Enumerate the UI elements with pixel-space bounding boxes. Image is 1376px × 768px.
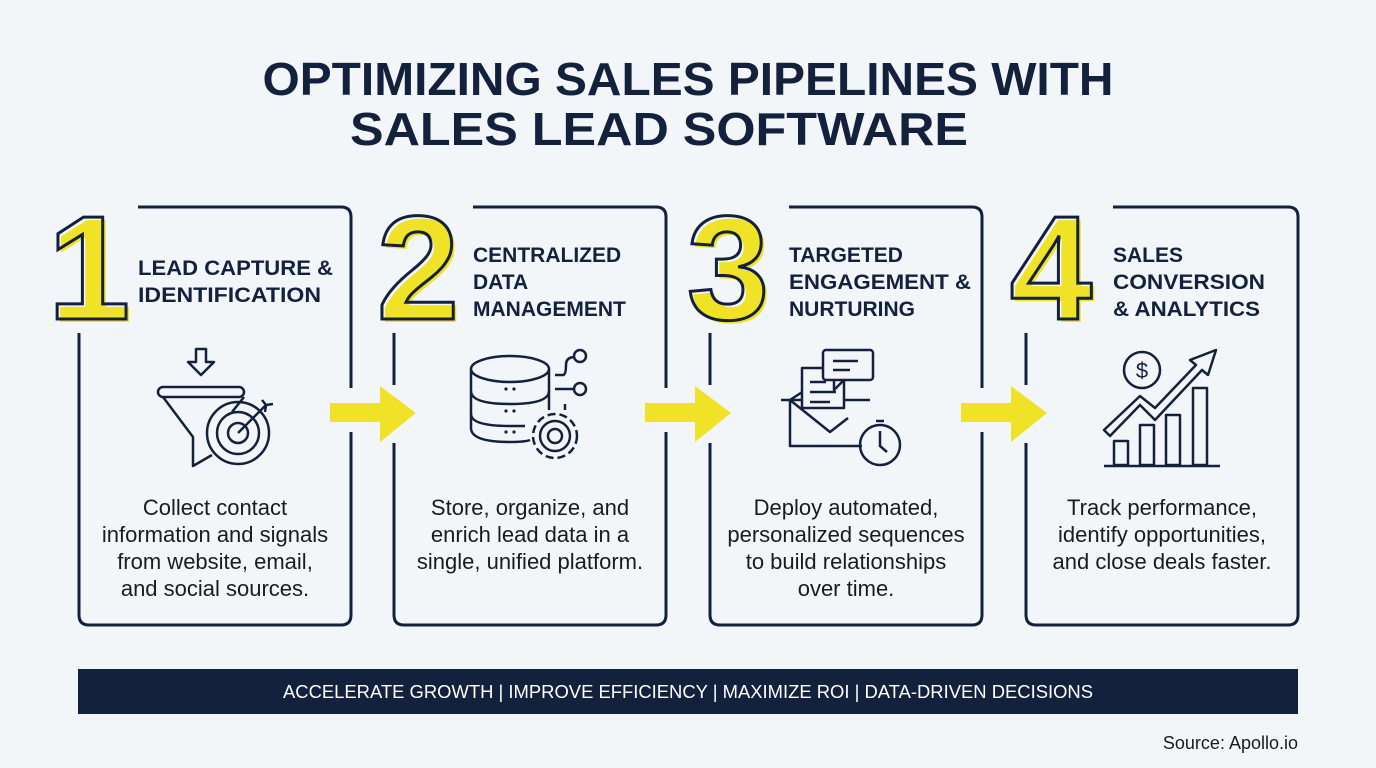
title: SALES LEAD SOFTWARE bbox=[350, 103, 968, 155]
title: OPTIMIZING SALES PIPELINES WITH bbox=[262, 53, 1114, 105]
heading 4 bbox=[1113, 244, 1265, 321]
number 1: 1 bbox=[48, 186, 130, 351]
heading 4: CONVERSION bbox=[1113, 271, 1265, 294]
number 3: 3 bbox=[687, 186, 769, 351]
body 3: to build relationships bbox=[746, 549, 946, 574]
heading 1: IDENTIFICATION bbox=[138, 284, 321, 307]
source: Source: Apollo.io bbox=[1163, 733, 1298, 753]
heading 3: TARGETED bbox=[789, 244, 903, 267]
icon: growth chart with dollar: $ bbox=[1136, 358, 1148, 383]
panel: step 2 data management bbox=[377, 186, 666, 625]
number 2: 2 bbox=[380, 189, 462, 354]
number 2: 2 bbox=[377, 186, 459, 351]
body 2: enrich lead data in a bbox=[431, 522, 630, 547]
body 1: Collect contact bbox=[143, 495, 287, 520]
panel: step 3 engagement bbox=[687, 186, 982, 625]
body 1: information and signals bbox=[102, 522, 328, 547]
body 2 bbox=[417, 495, 643, 574]
banner: ACCELERATE GROWTH | IMPROVE EFFICIENCY | MAXIMIZE ROI | DATA-DRIVEN DECISIONS bbox=[283, 682, 1093, 702]
icon: funnel and target bbox=[158, 349, 273, 466]
number 4: 4 bbox=[1013, 189, 1095, 354]
icon: envelope, chat and stopwatch bbox=[781, 350, 900, 465]
body 4 bbox=[1053, 495, 1271, 574]
body 1 bbox=[102, 495, 328, 601]
icon: database with gear bbox=[471, 350, 586, 458]
body 2: single, unified platform. bbox=[417, 549, 643, 574]
arrow 3 bbox=[961, 386, 1047, 442]
title bbox=[262, 53, 1114, 155]
icon: growth chart with dollar bbox=[1104, 350, 1220, 466]
arrow 2 bbox=[645, 386, 731, 442]
body 4: and close deals faster. bbox=[1053, 549, 1271, 574]
heading 4: & ANALYTICS bbox=[1113, 298, 1260, 321]
panel: step 1 lead capture bbox=[48, 186, 351, 625]
heading 1 bbox=[138, 257, 333, 307]
heading 3: NURTURING bbox=[789, 298, 915, 321]
heading 3: ENGAGEMENT & bbox=[789, 271, 971, 294]
body 3: personalized sequences bbox=[727, 522, 965, 547]
body 3 bbox=[727, 495, 965, 601]
heading 2 bbox=[473, 244, 626, 321]
body 3: Deploy automated, bbox=[754, 495, 938, 520]
heading 2: MANAGEMENT bbox=[473, 298, 626, 321]
heading 3 bbox=[789, 244, 971, 321]
body 4: identify opportunities, bbox=[1058, 522, 1266, 547]
number 3: 3 bbox=[690, 189, 772, 354]
heading 1: LEAD CAPTURE & bbox=[138, 257, 333, 280]
body 3: over time. bbox=[798, 576, 894, 601]
heading 2: CENTRALIZED bbox=[473, 244, 621, 267]
body 1: from website, email, bbox=[117, 549, 313, 574]
banner bbox=[78, 669, 1298, 714]
body 2: Store, organize, and bbox=[431, 495, 629, 520]
number 4: 4 bbox=[1010, 186, 1092, 351]
heading 4: SALES bbox=[1113, 244, 1183, 267]
heading 2: DATA bbox=[473, 271, 528, 294]
body 1: and social sources. bbox=[121, 576, 309, 601]
arrow 1 bbox=[330, 386, 416, 442]
number 1: 1 bbox=[51, 189, 133, 354]
body 4: Track performance, bbox=[1067, 495, 1257, 520]
panel: step 4 conversion bbox=[1010, 186, 1298, 625]
